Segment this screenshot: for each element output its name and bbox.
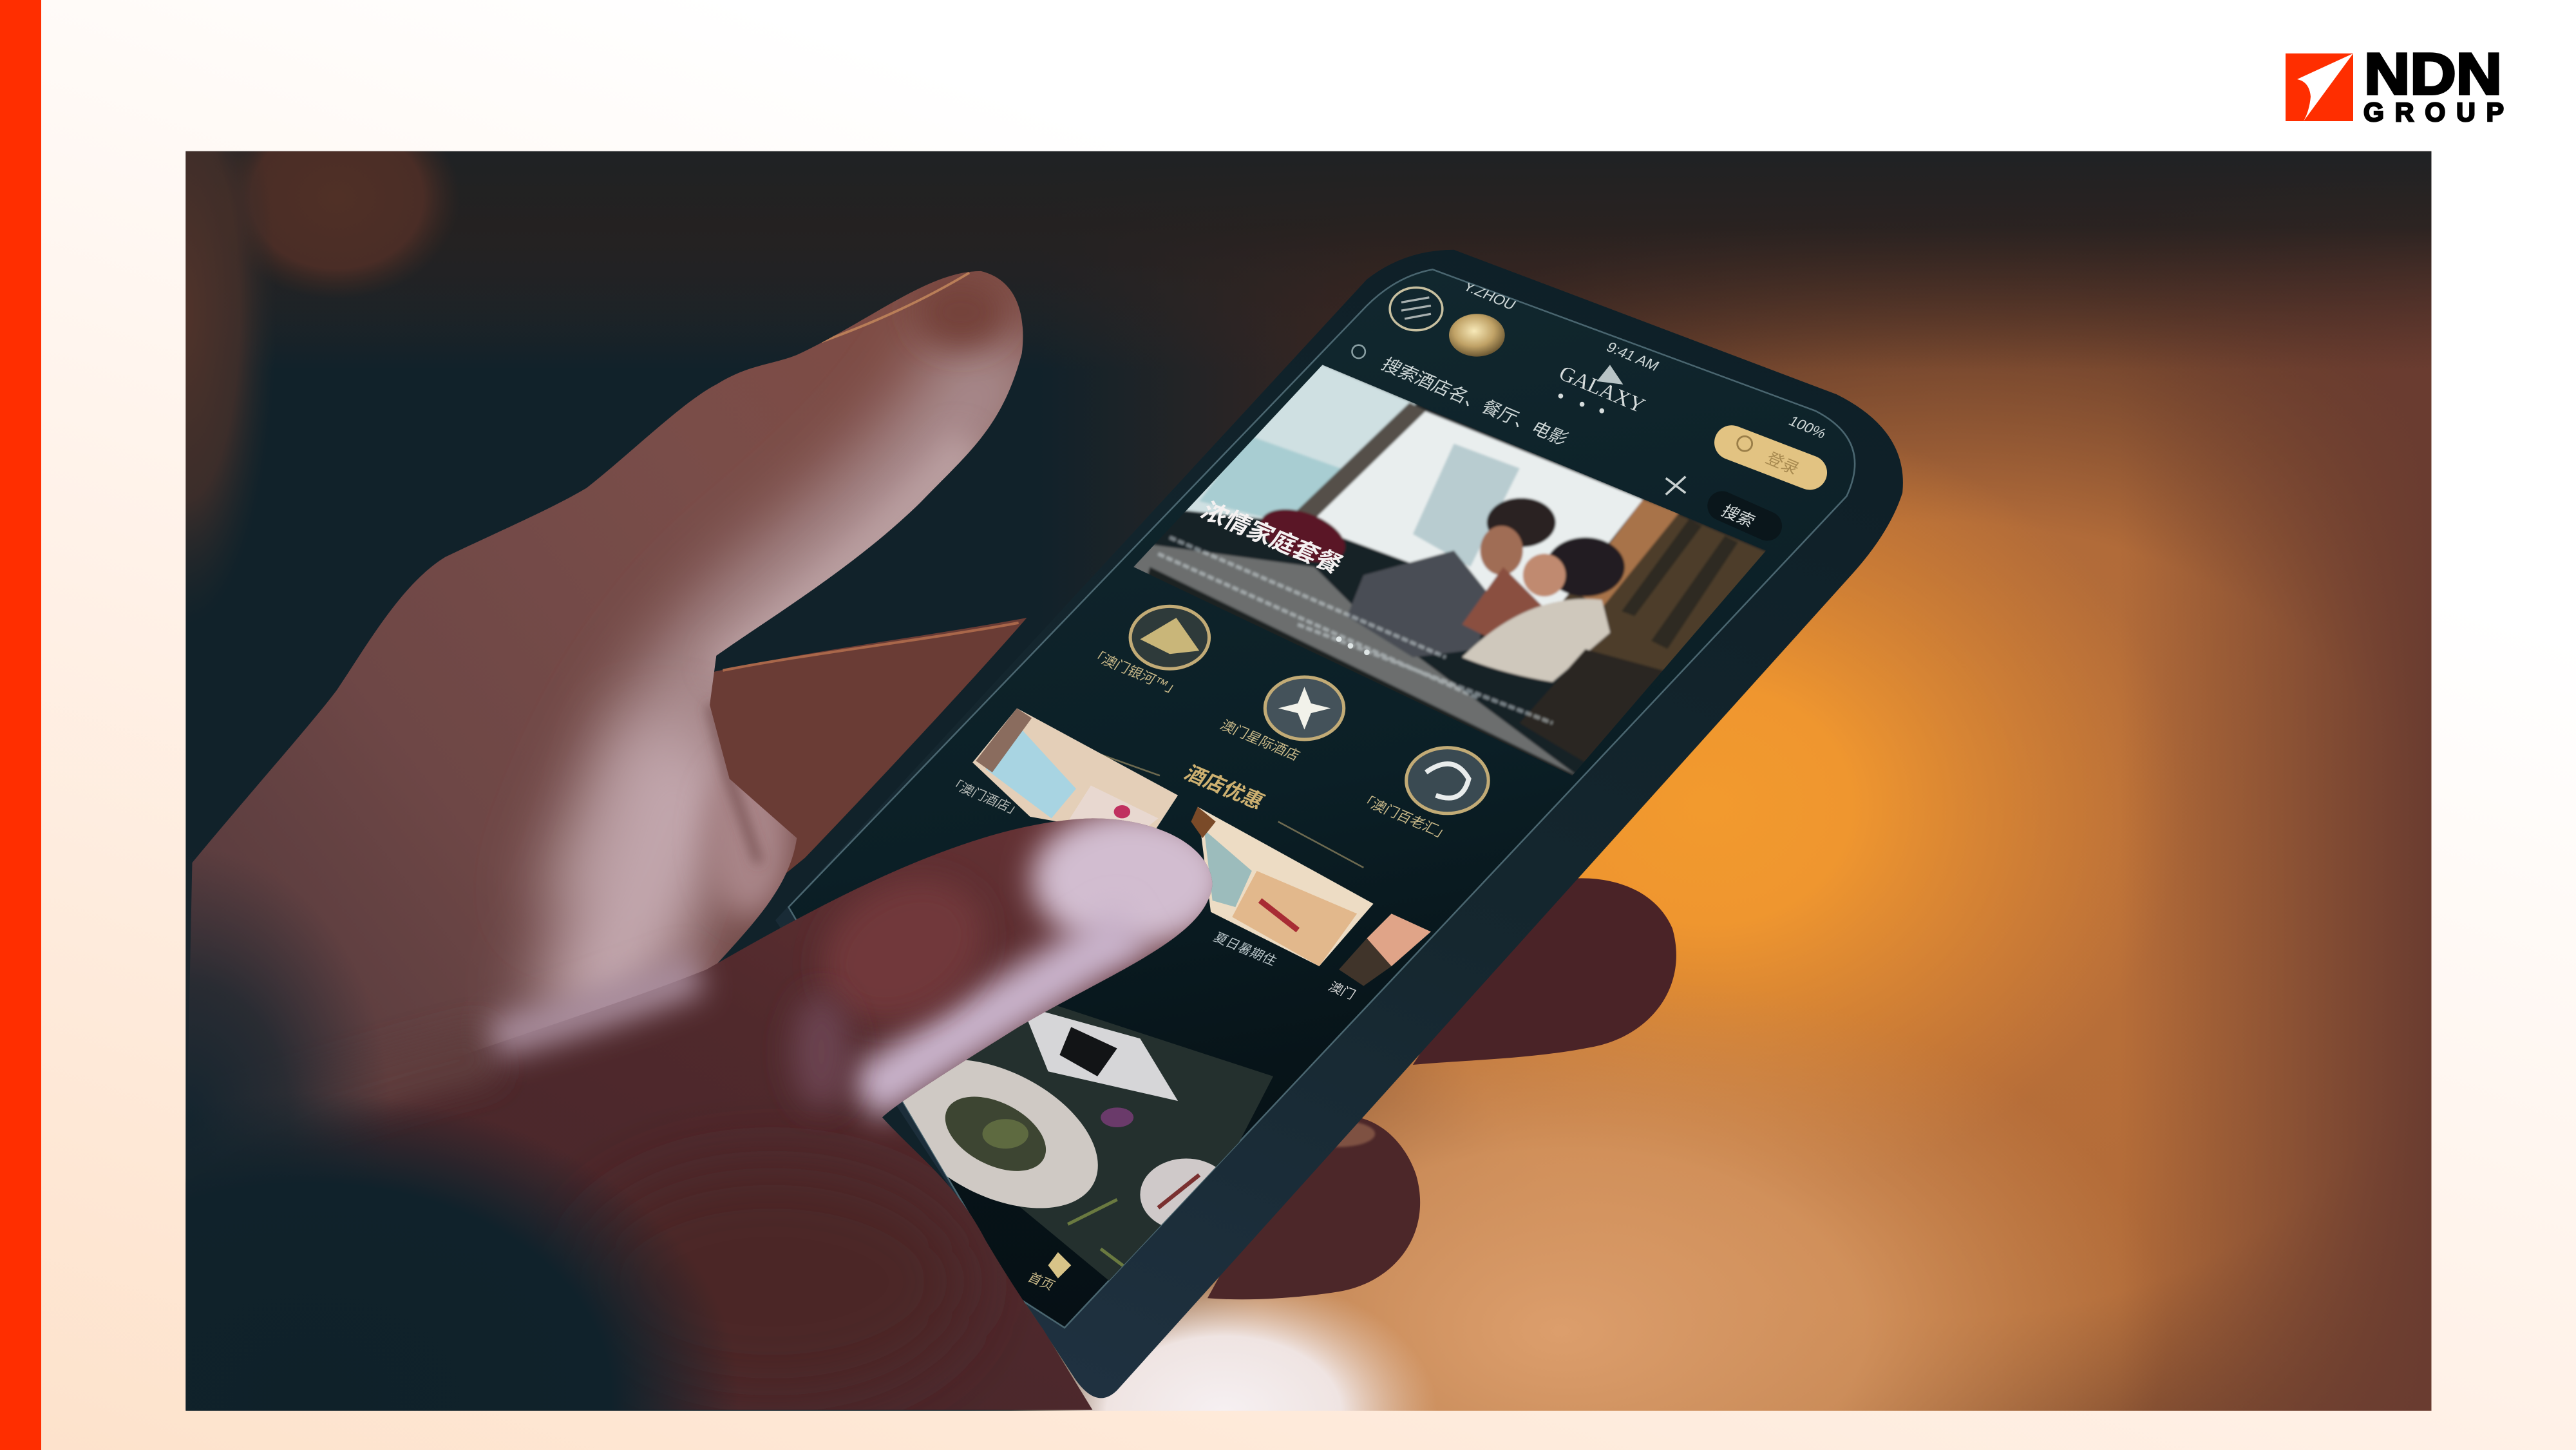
smartphone [775, 250, 1903, 1398]
status bar text [1461, 278, 1830, 441]
category icon: StarWorld: 澳门星际酒店 [1217, 717, 1303, 763]
gold coin [1449, 314, 1505, 357]
tab bar: home: 首页 [1025, 1270, 1057, 1293]
category icon: Galaxy Macau [1086, 606, 1209, 698]
Galaxy logo: GALAXY [1555, 362, 1649, 417]
logo wordmark NDN: NDN [2364, 42, 2502, 107]
middle finger behind the phone [690, 618, 1027, 888]
search button [1703, 486, 1786, 546]
status bar text: 9:41 AM [1604, 339, 1662, 374]
dark sleeve [185, 846, 744, 1411]
offer photo 1: 「澳门酒店」 [945, 776, 1025, 819]
category icon: Galaxy Macau: 「澳门银河™」 [1086, 647, 1184, 698]
logo wordmark GROUP: GROUP [2363, 97, 2504, 127]
hand: index finger and palm [185, 271, 1023, 1183]
soft blend between palm and lower hand [214, 1052, 493, 1134]
red side bar [0, 0, 41, 1450]
offer photo 3 [1325, 913, 1431, 1002]
category icon: Broadway [1355, 748, 1488, 843]
section heading: hotel offers: 酒店优惠 [1180, 761, 1269, 813]
offer photo 2 [1191, 807, 1374, 968]
phone screen [788, 269, 1855, 1328]
bokeh light [214, 151, 460, 299]
logo mark: red square with white arrow [2286, 53, 2353, 121]
offer photo 3: 澳门 [1325, 980, 1358, 1002]
login button [1709, 420, 1832, 495]
hero hotel photo [1117, 345, 1791, 788]
phone body [775, 250, 1903, 1398]
food photo [872, 994, 1273, 1315]
category icon: StarWorld [1217, 677, 1344, 763]
offer photo 1 [945, 708, 1178, 838]
menu icon [1390, 287, 1443, 330]
hero photo title: 浓情家庭套餐 [1196, 498, 1347, 578]
tab bar: home [1025, 1252, 1071, 1293]
category icon: Broadway: 「澳门百老汇」 [1355, 791, 1454, 843]
search placeholder: 搜索酒店名、餐厅、电影 [1378, 355, 1572, 449]
offer photo 2: 夏日暑期住 [1211, 930, 1279, 968]
status bar text: 100% [1786, 413, 1830, 441]
status bar text: Y.ZHOU [1461, 278, 1519, 313]
right-hand fingertips behind the phone [1208, 878, 1676, 1299]
logo: NDN Group [2286, 42, 2504, 127]
login button: 登录 [1762, 450, 1803, 478]
blurred background [185, 151, 2431, 1411]
search icon [1352, 345, 1365, 358]
hand: thumb and lower hand [185, 810, 1229, 1410]
close icon [1666, 477, 1685, 495]
photo: hand holding a smartphone [185, 151, 2431, 1411]
section heading: hotel offers [1068, 743, 1363, 868]
search button: 搜索 [1718, 502, 1758, 530]
palm highlight over the wrist crease [493, 973, 698, 1038]
